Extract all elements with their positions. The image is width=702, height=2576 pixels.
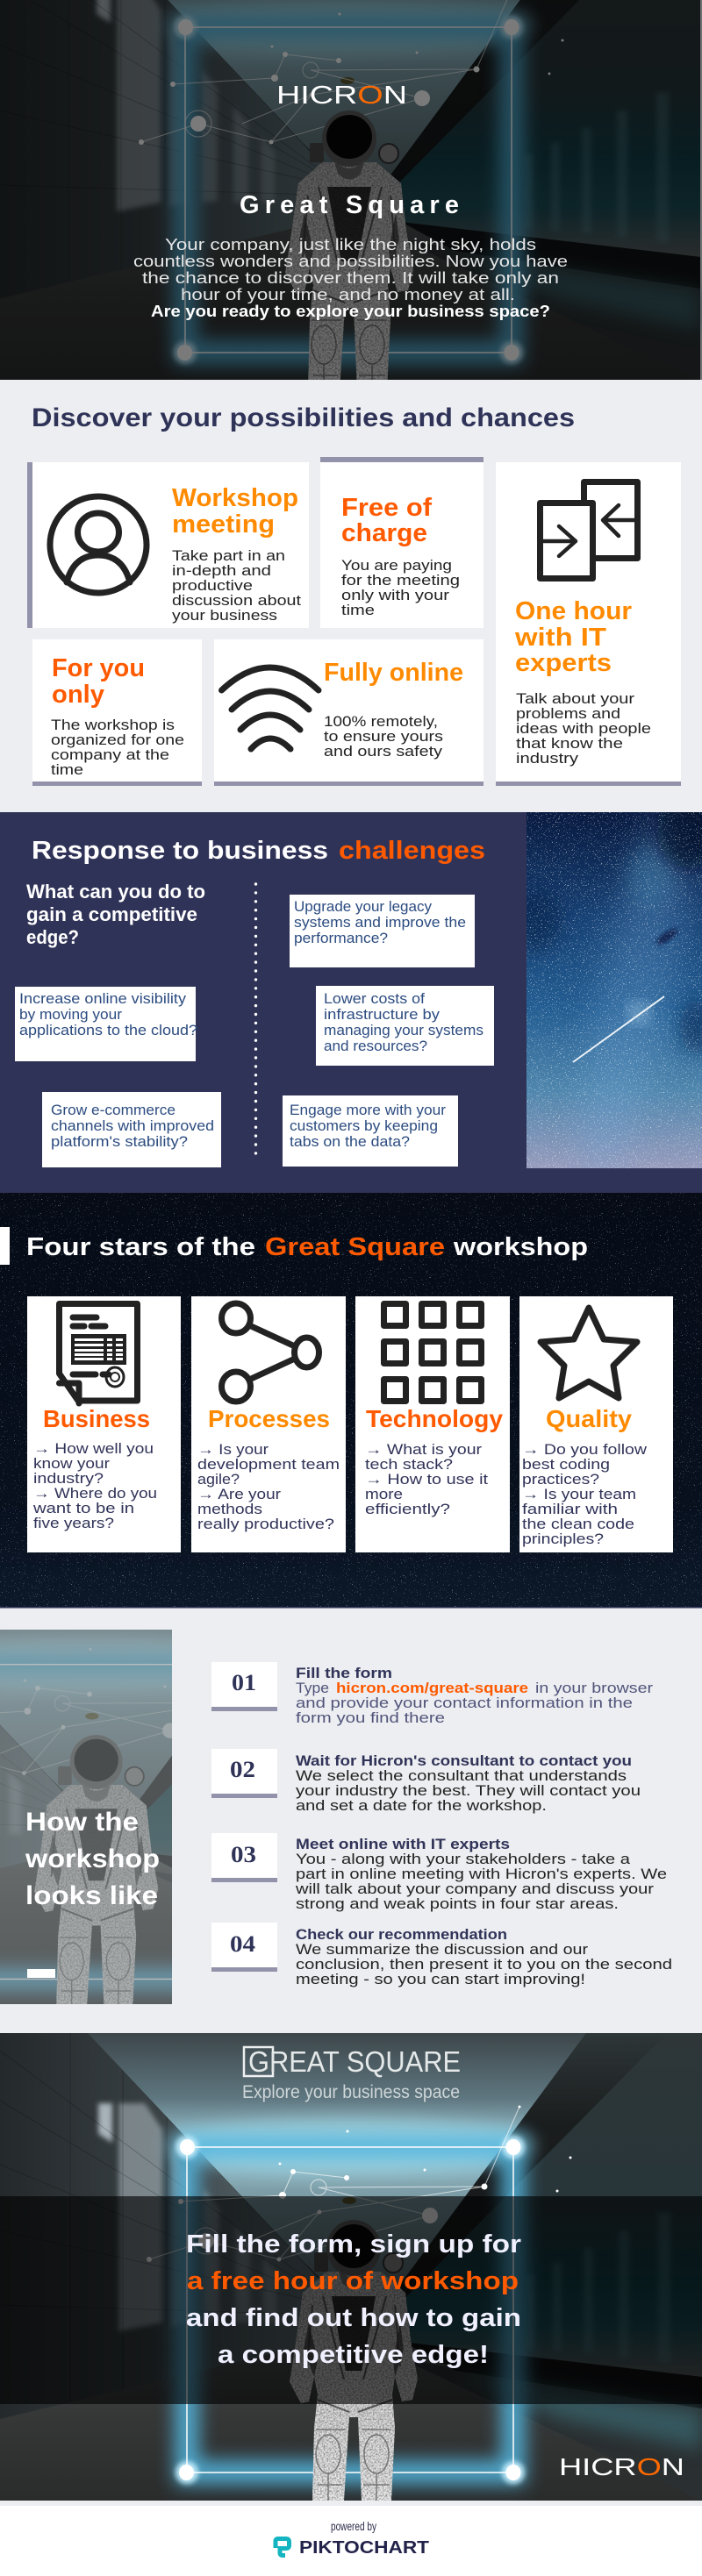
card: one hour with IT experts: experts (515, 649, 612, 677)
intro text: hour of your time, and no money at all. (181, 285, 515, 303)
card: processes: Processes (208, 1405, 330, 1432)
call to action text (186, 2230, 521, 2369)
card: one hour with IT experts (496, 462, 681, 786)
Hicron logo: HICR ON (559, 2453, 684, 2480)
step 02: We select the consultant that understands (296, 1767, 627, 1784)
constellation (147, 2105, 572, 2262)
panel: response to business challenges (0, 789, 702, 1193)
card: business: → How well you (33, 1440, 154, 1457)
card: workshop meeting (27, 462, 309, 628)
call to action text: and find out how to gain (186, 2304, 521, 2332)
step 03: will talk about your company and discuss your (295, 1880, 654, 1897)
card: workshop meeting: Workshop (172, 484, 298, 512)
card: quality: familiar with (522, 1501, 618, 1517)
step 03: Meet online with IT experts (296, 1836, 510, 1852)
question: What can you do to (26, 881, 205, 903)
box: infrastructure costs: managing your systems (324, 1022, 484, 1038)
card: for you only: For you (52, 654, 145, 682)
card: quality: → Is your team (522, 1486, 636, 1502)
Hicron logo: HICR ON (276, 82, 407, 110)
box: e-commerce: Grow e-commerce (51, 1102, 176, 1118)
box: infrastructure costs: Lower costs of (324, 990, 425, 1007)
box: online visibility: by moving your (19, 1006, 122, 1023)
step 01: in your browser (535, 1680, 653, 1696)
card: free of charge: You are paying (341, 557, 452, 574)
step 01 (211, 1662, 653, 1726)
card: workshop meeting: in-depth and (172, 562, 271, 579)
box: infrastructure costs (316, 986, 494, 1066)
card: quality: principles? (522, 1531, 604, 1547)
card: fully online: and ours safety (324, 743, 443, 760)
Great Square logo: Explore your business space (242, 2082, 460, 2102)
step 01: 01 (232, 1670, 256, 1695)
box: e-commerce: platform's stability? (51, 1133, 188, 1150)
icon: star (541, 1308, 637, 1398)
step 04: Check our recommendation (296, 1926, 507, 1943)
constellation (139, 0, 563, 145)
panel: discover possibilities (27, 403, 681, 786)
intro text: Your company, just like the night sky, holds (165, 235, 536, 253)
card: free of charge (320, 457, 484, 628)
call to action text: a free hour of workshop (187, 2267, 519, 2295)
card: for you only (32, 639, 202, 786)
card: processes: → Is your (197, 1441, 269, 1458)
card: workshop meeting: your business (172, 607, 277, 624)
box: e-commerce (42, 1092, 221, 1167)
box: legacy systems: performance? (294, 930, 388, 946)
box: customers: tabs on the data? (290, 1133, 410, 1150)
intro text (133, 235, 568, 320)
icon: exchange arrows (541, 482, 637, 579)
card: technology: Technology (366, 1405, 503, 1432)
step 01: Fill the form (296, 1665, 392, 1681)
question: gain a competitive (26, 903, 197, 925)
heading: Response to business (32, 837, 328, 865)
card: quality: → Do you follow (522, 1441, 648, 1458)
intro text: Are you ready to explore your business space? (151, 302, 550, 320)
step 01: and provide your contact information in the (296, 1695, 633, 1711)
panel: response to business challenges: challenges (339, 837, 485, 865)
step 03: part in online meeting with Hicron's experts. We (296, 1866, 667, 1882)
heading: Four stars of the (26, 1233, 255, 1261)
icon: person (50, 496, 147, 593)
footer: powered by Piktochart: powered by (331, 2520, 376, 2533)
panel: call to action (0, 2033, 702, 2501)
card: technology: → How to use it (365, 1471, 488, 1488)
astronaut (290, 2220, 418, 2501)
icon: Piktochart mark (276, 2538, 290, 2556)
step 01: form you find there (296, 1709, 445, 1726)
card: free of charge: Free of (341, 494, 432, 522)
box: online visibility (15, 987, 197, 1061)
corridor illustration (0, 0, 700, 381)
box: customers: Engage more with your (290, 1102, 446, 1118)
box: e-commerce: channels with improved (51, 1117, 214, 1134)
step 02 (211, 1749, 641, 1814)
step 02: 02 (230, 1757, 255, 1782)
intro text: the chance to discover them. It will take only an (142, 268, 559, 287)
step 03: 03 (231, 1842, 256, 1867)
card: workshop meeting: meeting (172, 510, 275, 539)
step 01: hicron.com/great-square (336, 1680, 528, 1696)
card: one hour with IT experts: One hour (515, 597, 632, 625)
astronaut (285, 111, 413, 391)
card: business: know your (33, 1455, 110, 1472)
Great Square logo (242, 2045, 461, 2102)
step 04: conclusion, then present it to you on the second (296, 1956, 672, 1973)
card: business: five years? (33, 1515, 114, 1531)
card: for you only: only (52, 681, 104, 709)
footer: powered by Piktochart (0, 2506, 702, 2576)
card: workshop meeting: productive (172, 577, 253, 594)
side title: looks like (25, 1881, 158, 1910)
icon: document (60, 1303, 137, 1403)
card: processes: development team (197, 1456, 340, 1473)
panel: hero (0, 0, 702, 391)
card: free of charge: charge (341, 519, 427, 547)
card: business: industry? (33, 1470, 104, 1487)
question (26, 881, 205, 948)
card: free of charge: for the meeting (341, 572, 460, 589)
card: processes (191, 1296, 346, 1552)
card: processes: agile? (197, 1471, 240, 1488)
card: for you only: The workshop is (51, 717, 175, 733)
card: business: → Where do you (33, 1485, 157, 1502)
card: processes: → Are your (197, 1486, 281, 1502)
heading: Discover your possibilities and chances (32, 403, 575, 432)
step 02: Wait for Hicron's consultant to contact you (296, 1752, 632, 1769)
title: Great Square (240, 191, 459, 219)
card: one hour with IT experts: with IT (514, 624, 606, 652)
panel: four stars: Great Square (265, 1233, 445, 1261)
box: infrastructure costs: and resources? (324, 1038, 427, 1054)
box: legacy systems (290, 895, 475, 967)
card: processes: methods (197, 1501, 262, 1517)
card: for you only: company at the (51, 746, 169, 763)
step 02: and set a date for the workshop. (296, 1797, 547, 1814)
box: customers (283, 1095, 458, 1167)
card: business (27, 1296, 181, 1552)
box: legacy systems: Upgrade your legacy (294, 898, 432, 915)
card: quality: the clean code (522, 1516, 634, 1532)
card: for you only: time (51, 761, 83, 778)
card: technology: tech stack? (365, 1456, 453, 1473)
step 01: Type (296, 1680, 329, 1696)
card: technology: more (365, 1486, 403, 1502)
intro text: countless wonders and possibilities. Now you have (133, 252, 568, 270)
side title (25, 1808, 160, 1910)
side title: workshop (25, 1845, 160, 1873)
side title: How the (25, 1808, 139, 1837)
box: legacy systems: systems and improve the (294, 914, 466, 931)
footer: powered by Piktochart: PIKTOCHART (299, 2538, 429, 2558)
step 03: You - along with your stakeholders - take a (296, 1851, 631, 1867)
box: online visibility: Increase online visibility (19, 990, 187, 1007)
panel: four stars (0, 1193, 702, 1609)
icon: wifi signal (221, 667, 319, 749)
card: fully online: 100% remotely, (324, 713, 438, 730)
step 04: meeting - so you can start improving! (296, 1971, 585, 1987)
card: quality (519, 1296, 673, 1552)
Great Square logo: GREAT SQUARE (248, 2045, 461, 2078)
card: processes: really productive? (197, 1516, 334, 1532)
panel: four stars: workshop (453, 1233, 588, 1261)
card: technology: → What is your (365, 1441, 482, 1458)
card: business: Business (43, 1405, 150, 1432)
card: business: want to be in (32, 1500, 134, 1516)
card: fully online: Fully online (324, 659, 463, 687)
step 03: strong and weak points in four star areas. (296, 1895, 619, 1912)
card: free of charge: time (341, 602, 375, 618)
card: one hour with IT experts: industry (516, 750, 579, 767)
card: for you only: organized for one (51, 731, 184, 748)
icon: grid of squares (384, 1303, 481, 1402)
card: quality: practices? (522, 1471, 599, 1488)
card: workshop meeting: Take part in an (172, 547, 285, 564)
card: one hour with IT experts: that know the (516, 735, 623, 752)
card: quality: best coding (522, 1456, 610, 1473)
step 02: your industry the best. They will contact you (296, 1782, 641, 1799)
photo: night sky (509, 789, 702, 1188)
step 04: We summarize the discussion and our (296, 1941, 588, 1958)
card: fully online: to ensure yours (324, 728, 443, 745)
step 04: 04 (230, 1931, 255, 1957)
call to action text: Fill the form, sign up for (186, 2230, 521, 2258)
card: workshop meeting: discussion about (172, 592, 301, 609)
card: one hour with IT experts: Talk about your (516, 690, 634, 707)
box: online visibility: applications to the cloud? (19, 1022, 197, 1038)
card: technology: efficiently? (365, 1501, 450, 1517)
card: technology (355, 1296, 510, 1552)
call to action text: a competitive edge! (218, 2341, 489, 2369)
panel: how the workshop looks like (0, 1630, 671, 2004)
photo: astronaut in corridor (0, 1630, 172, 2004)
question: edge? (26, 926, 79, 948)
icon: share nodes (221, 1303, 319, 1402)
card: free of charge: only with your (341, 587, 449, 603)
corridor illustration (0, 2033, 702, 2501)
card: one hour with IT experts: ideas with people (516, 720, 651, 737)
box: customers: customers by keeping (290, 1117, 438, 1134)
card: fully online (214, 639, 484, 786)
box: infrastructure costs: infrastructure by (324, 1006, 441, 1023)
step 04 (211, 1923, 672, 1987)
step 03 (211, 1833, 667, 1912)
card: quality: Quality (546, 1405, 632, 1432)
card: one hour with IT experts: problems and (516, 705, 620, 722)
